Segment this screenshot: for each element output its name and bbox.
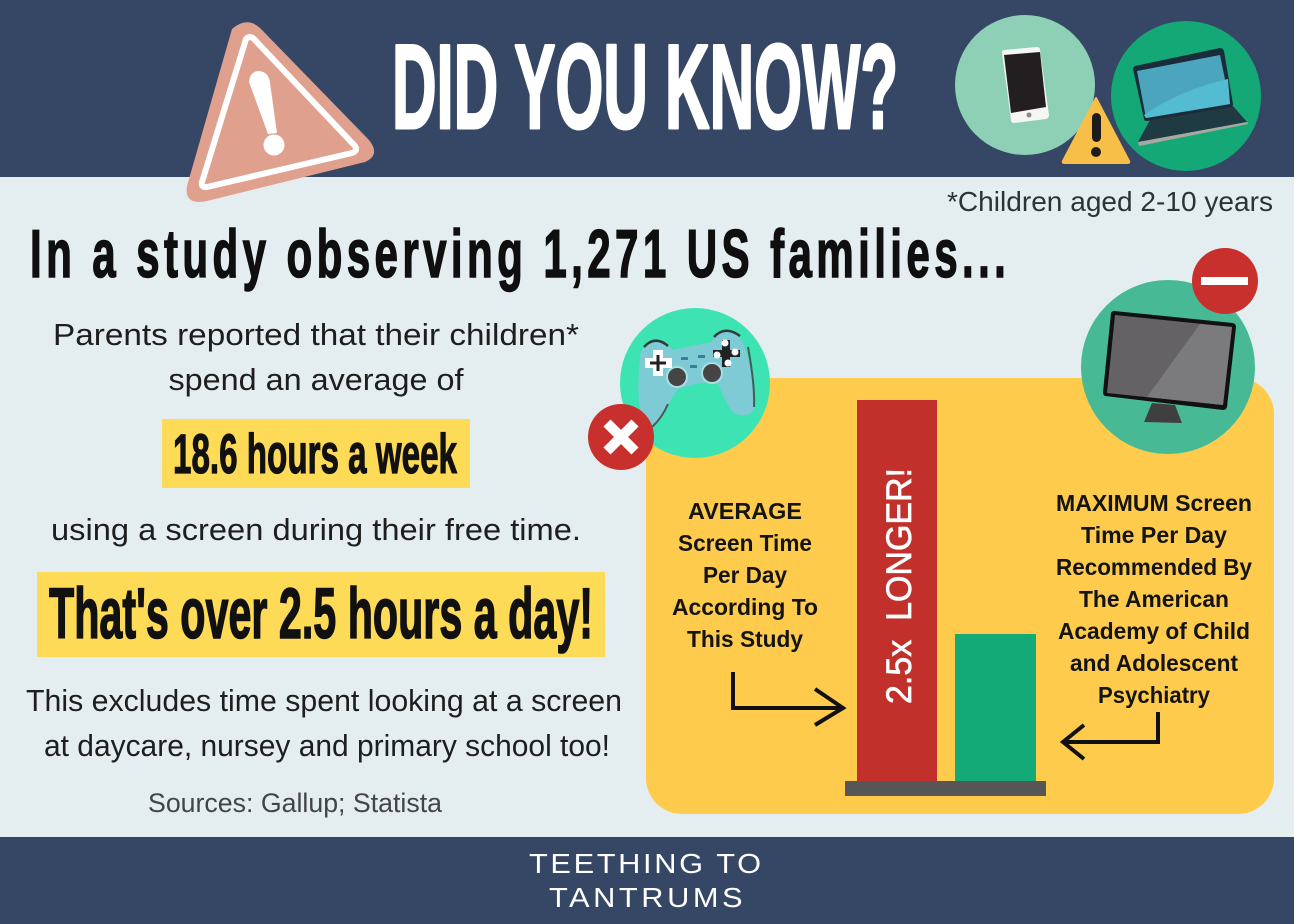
icon: game controller: [620, 308, 770, 458]
text: maximum label: Recommended By: [1056, 554, 1252, 580]
bar: maximum: [955, 634, 1036, 782]
text: average label: AVERAGE: [688, 498, 802, 524]
icon: monitor: [1081, 280, 1255, 454]
highlight: hours a day: That's over 2.5 hours a day!: [49, 575, 593, 654]
text: maximum label: MAXIMUM Screen: [1056, 490, 1252, 516]
text: maximum label: Academy of Child: [1058, 618, 1250, 644]
footer brand text: TANTRUMS: [549, 882, 743, 914]
footer brand text: [529, 848, 761, 914]
header band: [0, 0, 1294, 177]
text: average label: According To: [672, 594, 818, 620]
highlight: hours a day: [37, 572, 605, 657]
footnote: *Children aged 2-10 years: [947, 186, 1273, 217]
highlight: hours a week: 18.6 hours a week: [173, 422, 457, 485]
arrow: to red bar: [733, 672, 843, 725]
icon: phone in circle: [955, 15, 1095, 155]
text: average label: This Study: [687, 626, 803, 652]
footer band: [0, 837, 1294, 924]
subtitle: In a study observing 1,271 US families...: [30, 216, 1006, 291]
text block: exclusions: [26, 683, 622, 763]
text: maximum label: [1056, 490, 1252, 708]
footer brand text: TEETHING TO: [529, 848, 761, 880]
text: average label: [672, 498, 818, 652]
text: maximum label: The American: [1079, 586, 1229, 612]
text block: parents reported: spend an average of: [168, 362, 464, 397]
bar label: 2.5x LONGER!: [880, 468, 919, 704]
bar: average: [857, 400, 937, 782]
text: average label: Screen Time: [678, 530, 812, 556]
text: maximum label: Psychiatry: [1098, 682, 1210, 708]
text: maximum label: and Adolescent: [1070, 650, 1238, 676]
panel: bar chart comparison: [646, 378, 1274, 814]
text block: exclusions: This excludes time spent looking at a screen: [26, 683, 622, 718]
icon: warning triangle: [187, 22, 374, 202]
icon: red minus: [1192, 248, 1258, 314]
text block: parents reported: Parents reported that their children*: [53, 317, 579, 352]
icon: red cross: [588, 404, 654, 470]
arrow: to green bar: [1063, 712, 1158, 759]
text: free time: using a screen during their free time.: [51, 512, 581, 547]
text: maximum label: Time Per Day: [1081, 522, 1227, 548]
sources: Sources: Gallup; Statista: [148, 788, 443, 818]
text block: exclusions: at daycare, nursey and primary school too!: [44, 728, 610, 763]
text block: parents reported: [53, 317, 579, 397]
highlight: hours a week: [162, 419, 470, 488]
chart baseline: [845, 781, 1046, 796]
text: average label: Per Day: [703, 562, 787, 588]
icon: laptop in circle: [1111, 21, 1261, 171]
icon: small warning triangle: [1063, 98, 1129, 163]
